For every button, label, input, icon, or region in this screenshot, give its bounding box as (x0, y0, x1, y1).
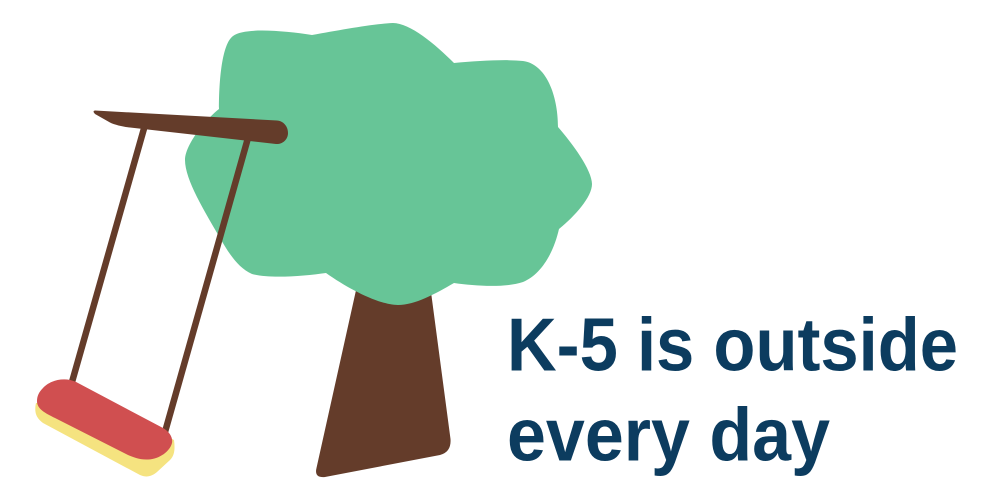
caption line 2: every day (507, 392, 830, 476)
seat top (37, 379, 172, 460)
left swing rope (72, 125, 145, 382)
swing seat (35, 379, 175, 476)
caption text (507, 302, 958, 476)
right swing rope (165, 138, 248, 432)
tree branch (94, 110, 288, 144)
tree trunk (316, 288, 451, 477)
caption line 1: K-5 is outside (507, 302, 958, 386)
tree canopy (185, 23, 592, 305)
seat underside (35, 400, 175, 476)
